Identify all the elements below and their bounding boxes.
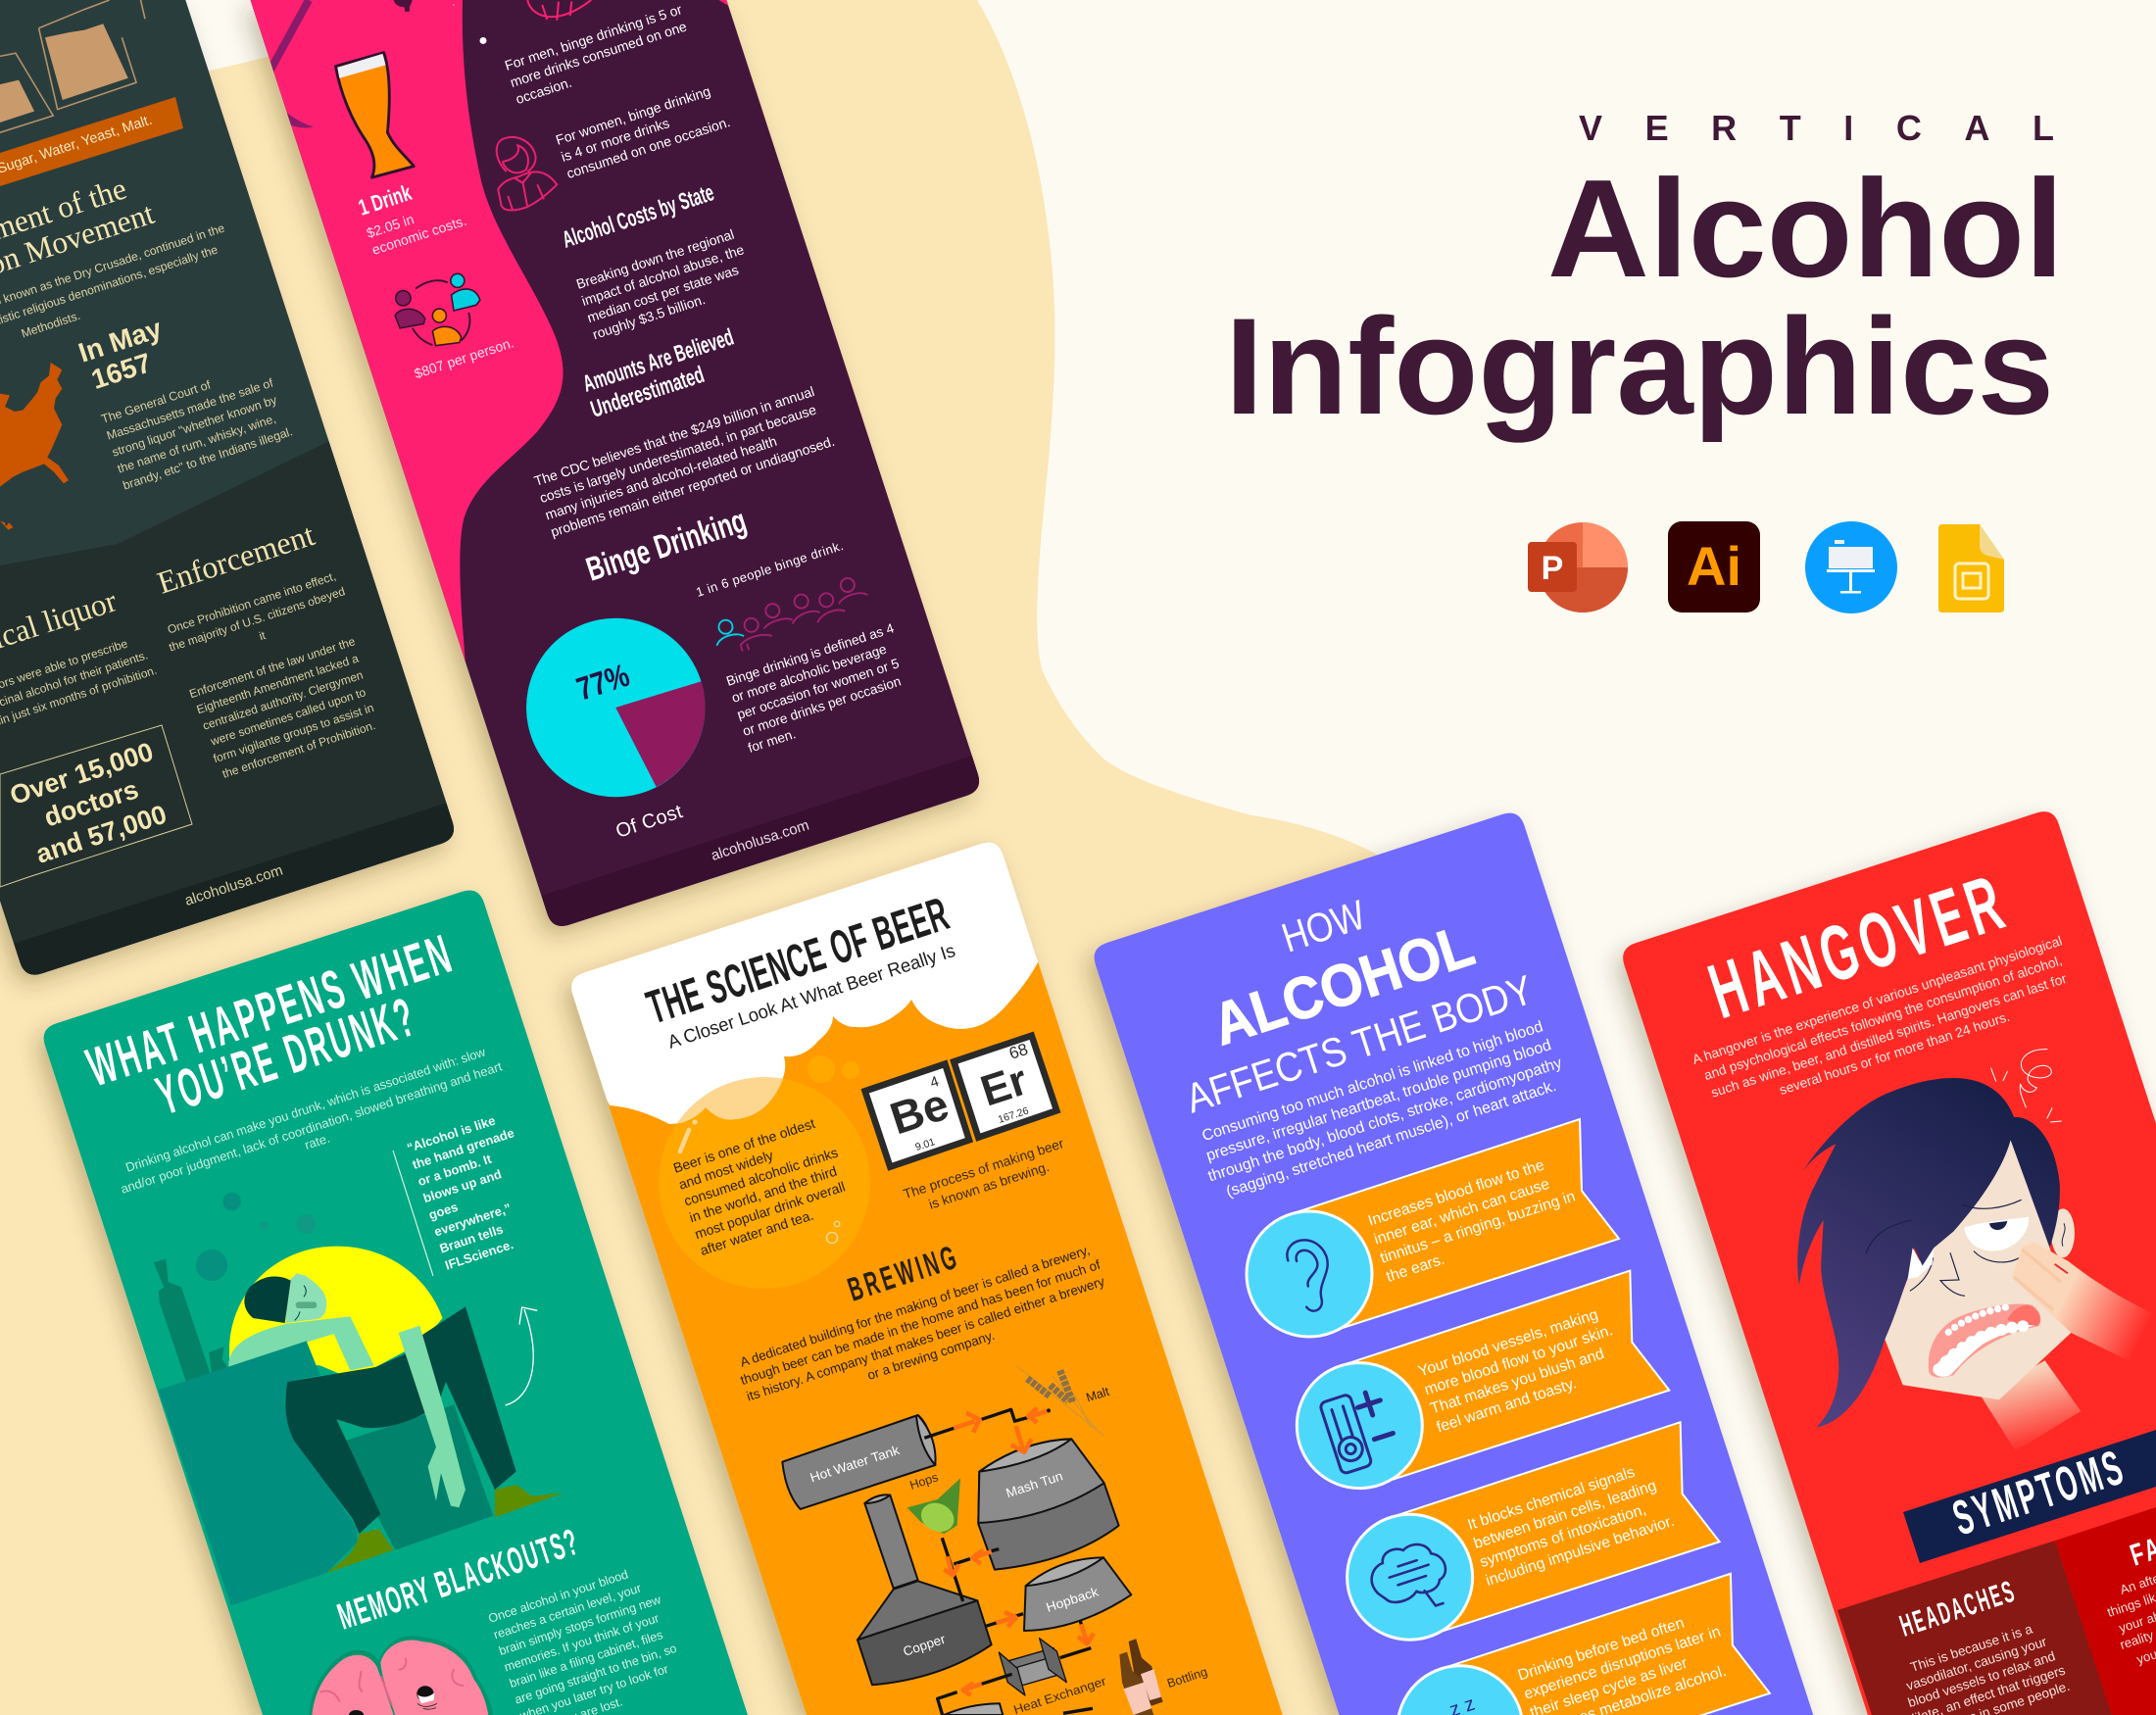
background bubbles bbox=[196, 1193, 316, 1281]
subheading: A Closer Look At What Beer Really Is bbox=[665, 941, 958, 1054]
text: process: The process of making beer bbox=[902, 1136, 1066, 1201]
callout: in may 1657: 1657 bbox=[87, 347, 155, 395]
lower dark section bbox=[0, 441, 454, 975]
text: intro: and/or poor judgment, lack of coordination, slowed breathing and heart bbox=[119, 1058, 504, 1197]
ear bbox=[2051, 1208, 2075, 1257]
heading: brewing: BREWING bbox=[844, 1238, 964, 1309]
hanging arm bbox=[399, 1326, 466, 1507]
ribbon 2: thermometer: That makes you blush and bbox=[1429, 1346, 1606, 1417]
hair bbox=[244, 1276, 291, 1323]
icon: powerpoint: P bbox=[1542, 550, 1563, 587]
text: intro: Drinking alcohol can make you drunk, which is associated with: slow bbox=[123, 1044, 488, 1175]
white dots bbox=[480, 37, 487, 44]
malt stalks bbox=[1016, 1365, 1104, 1436]
text: enforcement of the law: the enforcement of Prohibition. bbox=[220, 718, 377, 781]
lower teeth bbox=[1938, 1326, 2034, 1369]
illustration: beer tanks bbox=[0, 0, 145, 132]
text: brewing body: its history. A company that makes beer is called either a brewery bbox=[745, 1274, 1106, 1404]
diagram: brewing process: Hot Water Tank bbox=[808, 1443, 902, 1486]
text: process: is known as brewing. bbox=[927, 1159, 1051, 1212]
text: intro: and psychological effects following the consumption of alcohol, bbox=[1702, 953, 2064, 1083]
heading: binge drinking: Binge Drinking bbox=[582, 502, 751, 589]
back and arm bbox=[228, 1316, 374, 1370]
icon: ear bbox=[1283, 1234, 1342, 1314]
right block bbox=[346, 1404, 493, 1550]
traced top fragments bbox=[269, 0, 591, 211]
periodic tiles: be er: 68 bbox=[1006, 1040, 1030, 1063]
trousers bbox=[285, 1306, 516, 1534]
tank: hot water bbox=[782, 1415, 936, 1509]
bubble highlights bbox=[680, 1130, 840, 1243]
icon: three people bbox=[395, 273, 480, 346]
title block bbox=[1225, 108, 2064, 443]
upper teeth bbox=[1948, 1307, 2006, 1332]
foam overlap tint bbox=[659, 1077, 870, 1289]
text: cdc: costs is largely underestimated, in part because bbox=[538, 402, 818, 506]
text: beer oldest: consumed alcoholic drinks bbox=[682, 1145, 840, 1209]
icon: row of people bbox=[717, 578, 867, 652]
heat exchanger bbox=[999, 1639, 1066, 1695]
label: bottling: Bottling bbox=[1165, 1665, 1209, 1690]
text: dry crusade: Methodists. bbox=[20, 309, 82, 340]
text: memory blackouts body: Once alcohol in your blood bbox=[487, 1567, 630, 1626]
label: malt: Malt bbox=[1085, 1385, 1111, 1405]
text: men binge: For men, binge drinking is 5 or bbox=[503, 1, 684, 74]
ribbon 2: thermometer: more blood flow to your skin. bbox=[1422, 1322, 1615, 1398]
text: brewing body: though beer can be made in the home and has been for much of bbox=[739, 1257, 1102, 1388]
text: regional impact: Breaking down the regional bbox=[574, 226, 736, 292]
symptom panel: headaches bbox=[1838, 1541, 2112, 1715]
text: once prohibition: Once Prohibition came into effect, bbox=[166, 569, 337, 637]
heading: how alcohol affects the body: ALCOHOL bbox=[1204, 912, 1482, 1057]
text: 1 in 6: 1 in 6 people binge drink. bbox=[694, 538, 845, 600]
icon: woman outline bbox=[497, 137, 557, 211]
neck bbox=[1982, 1360, 2081, 1451]
decorative magenta strokes bbox=[269, 0, 309, 74]
heading: enforcement: Enforcement bbox=[153, 516, 318, 601]
symptom panel: fatigue: reality bbox=[2118, 1628, 2156, 1652]
heading: amounts underestimated bbox=[580, 324, 737, 423]
symptom panel: headaches: vasodilator, causing your bbox=[1904, 1634, 2049, 1693]
text: general court: Massachusetts made the sale of bbox=[105, 375, 275, 443]
chart: pie of cost bbox=[526, 618, 706, 797]
vessel: hopback bbox=[1024, 1557, 1131, 1631]
icon: illustrator bbox=[1668, 521, 1760, 612]
ribbon 3: brain bbox=[1348, 1422, 1720, 1640]
ribbon 3: brain: between brain cells, leading bbox=[1472, 1478, 1658, 1552]
ribbon 1: ear: tinnitus – a ringing, buzzing in bbox=[1378, 1188, 1578, 1267]
callout: in may 1657: In May bbox=[74, 313, 166, 368]
big beer bubble bbox=[659, 1077, 870, 1289]
periodic tiles: be er: 167.26 bbox=[997, 1104, 1030, 1126]
ribbon 2: thermometer: feel warm and toasty. bbox=[1435, 1375, 1579, 1436]
text: binge definition: for men. bbox=[746, 726, 798, 756]
text: economic costs: economic costs. bbox=[370, 213, 468, 258]
text: beer oldest: Beer is one of the oldest bbox=[671, 1115, 817, 1176]
text: general court: brandy, etc" to the Indians illegal. bbox=[122, 424, 294, 493]
panel: green what happens card bbox=[44, 891, 748, 1715]
ribbon 1: ear: the ears. bbox=[1385, 1251, 1446, 1286]
ribbon 3: brain: symptoms of intoxication, bbox=[1478, 1501, 1648, 1571]
pink organic panel bbox=[237, 0, 564, 688]
label: hops: Hops bbox=[908, 1470, 940, 1493]
eye bbox=[1964, 1217, 2029, 1251]
stat box: 15,000 doctors: and 57,000 bbox=[32, 800, 171, 869]
ribbon 4: sleep: Drinking before bed often bbox=[1516, 1615, 1687, 1685]
ear crease bbox=[2062, 1223, 2065, 1247]
heading: amounts underestimated: Underestimated bbox=[588, 362, 708, 423]
illustration: drunk person bbox=[154, 1193, 564, 1605]
text: intro: A hangover is the experience of various unpleasant physiological bbox=[1690, 933, 2064, 1067]
quote rule bbox=[393, 1151, 433, 1276]
text: brewing body: or a brewing company. bbox=[865, 1328, 997, 1383]
ribbon 1: ear: inner ear, which can cause bbox=[1372, 1176, 1552, 1249]
text: general court: the name of rum, whisky, wine, bbox=[116, 412, 277, 476]
heading: how alcohol affects the body bbox=[1180, 891, 1539, 1122]
text: enforcement of the law: form vigilante groups to assist in bbox=[212, 701, 375, 765]
periodic tiles: be er: 4 bbox=[928, 1073, 941, 1092]
heading: what happens when you're drunk: WHAT HAPPENS WHEN bbox=[79, 922, 461, 1098]
mouth bbox=[1929, 1304, 2040, 1377]
periodic tiles: be er: Be bbox=[884, 1078, 955, 1145]
text: intro: through the body, blood clots, stroke, cardiomyopathy bbox=[1206, 1054, 1564, 1185]
text: brewing body: A dedicated building for the making of beer is called a brewery, bbox=[738, 1243, 1092, 1370]
quote: “Alcohol is like bbox=[405, 1113, 497, 1155]
heading: what happens when you're drunk bbox=[79, 922, 461, 1126]
text: memory blackouts body: reaches a certain level, your bbox=[492, 1581, 643, 1642]
face lines bbox=[1866, 1200, 2023, 1296]
hair bbox=[1797, 1078, 2060, 1428]
periodic tiles: be er: 9.01 bbox=[914, 1136, 937, 1153]
quote: everywhere,” bbox=[432, 1200, 513, 1239]
panel: plum cost card bbox=[237, 0, 983, 930]
text: enforcement of the law: Eighteenth Amendment lacked a bbox=[195, 651, 361, 716]
banner: symptoms bbox=[1903, 1430, 2156, 1563]
text: enforcement of the law: centralized authority. Clergymen bbox=[201, 668, 365, 733]
ribbon 1: ear bbox=[1247, 1119, 1619, 1337]
heading: amounts underestimated: Amounts Are Believed bbox=[580, 324, 737, 398]
label: 77%: 77% bbox=[572, 657, 634, 708]
icon: brain bbox=[1364, 1536, 1456, 1622]
text: memory blackouts body: memories. If you think of your bbox=[503, 1611, 661, 1674]
text: women binge: For women, binge drinking bbox=[554, 83, 712, 148]
face bbox=[1885, 1137, 2071, 1399]
text: per person: $807 per person. bbox=[413, 334, 515, 381]
ribbon 4: sleep: experience disruptions later in bbox=[1522, 1624, 1723, 1703]
symptom panel: fatigue bbox=[2055, 1506, 2156, 1715]
periodic tiles: be er: Er bbox=[975, 1056, 1033, 1116]
stat box: 15,000 doctors: doctors bbox=[40, 774, 142, 832]
curved arrow bbox=[506, 1307, 537, 1405]
text: beer oldest: most popular drink overall bbox=[693, 1178, 847, 1242]
icon: thermometer bbox=[1319, 1385, 1400, 1474]
quote: IFLScience. bbox=[443, 1237, 515, 1273]
diagram: brewing process bbox=[782, 1365, 1209, 1715]
symptom panel: headaches: This is because it is a bbox=[1908, 1621, 2034, 1675]
icon: powerpoint bbox=[1528, 522, 1628, 612]
quote: goes bbox=[427, 1200, 460, 1222]
text: general court: The General Court of bbox=[100, 377, 213, 426]
icon: illustrator: Ai bbox=[1687, 535, 1741, 597]
shoes bbox=[326, 1485, 564, 1573]
ribbon 2: thermometer: Your blood vessels, making bbox=[1416, 1306, 1600, 1380]
vessel: copper bbox=[858, 1494, 992, 1685]
software icons row bbox=[1528, 521, 2004, 613]
text: enforcement of the law: were sometimes called upon to bbox=[208, 685, 368, 749]
text: economic costs: $2.05 in bbox=[365, 211, 416, 241]
quote: or a bomb. It bbox=[416, 1152, 494, 1189]
footer band bbox=[541, 756, 983, 930]
icon: top fragment bbox=[394, 0, 413, 12]
text: intro: several hours or for more than 24 hours. bbox=[1778, 1009, 2012, 1098]
diagram: brewing process: Copper bbox=[902, 1632, 948, 1659]
quote: Braun tells bbox=[438, 1222, 505, 1256]
diagram: brewing process: Hopback bbox=[1045, 1584, 1101, 1615]
text: cdc: many injuries and alcohol-related health bbox=[543, 433, 779, 522]
ribbon 3: brain: It blocks chemical signals bbox=[1466, 1464, 1637, 1534]
quote: the hand grenade bbox=[411, 1125, 516, 1172]
text: cdc: problems remain either reported or undiagnosed. bbox=[549, 433, 836, 540]
panel: dark prohibition card bbox=[0, 0, 457, 994]
footer url: alcoholusa.com bbox=[709, 817, 811, 864]
diagram: brewing process: Mash Tun bbox=[1004, 1468, 1064, 1500]
text: intro: pressure, irregular heartbeat, trouble pumping blood bbox=[1204, 1037, 1553, 1164]
text: men binge: occasion. bbox=[514, 74, 573, 107]
footer url: alcoholusa.com bbox=[182, 862, 285, 909]
panel: purple body card bbox=[1095, 813, 1813, 1715]
icon: google slides bbox=[1938, 524, 2004, 612]
text: binge definition: or more drinks per occasion bbox=[741, 673, 903, 739]
stat box: 15,000 doctors bbox=[0, 725, 192, 887]
hops bbox=[907, 1478, 960, 1537]
periodic tiles: be er bbox=[865, 1036, 1056, 1167]
bottom vessel bbox=[944, 1703, 1003, 1715]
small bubbles bbox=[808, 1055, 859, 1083]
text: intro: (sagging, stretched heart muscle), or heart attack. bbox=[1224, 1078, 1558, 1200]
text: women binge: consumed on one occasion. bbox=[564, 114, 732, 181]
face details bbox=[295, 1286, 306, 1320]
heading: science of beer: THE SCIENCE OF BEER bbox=[641, 888, 956, 1034]
head bbox=[286, 1273, 326, 1323]
heading: memory blackouts: MEMORY BLACKOUTS? bbox=[333, 1522, 584, 1639]
text: once prohibition: it bbox=[258, 628, 268, 643]
text: men binge: more drinks consumed on one bbox=[509, 18, 689, 90]
text: intro: such as wine, beer, and distilled spirits. Hangovers can last for bbox=[1709, 971, 2069, 1101]
heading: how alcohol affects the body: AFFECTS THE BODY bbox=[1180, 966, 1539, 1122]
vessel: mash tun bbox=[978, 1439, 1119, 1570]
text: general court: strong liquor "whether known by bbox=[111, 393, 279, 460]
stat box: 15,000 doctors: Over 15,000 bbox=[6, 737, 157, 810]
ribbon 4: sleep bbox=[1397, 1574, 1770, 1715]
heading: how alcohol affects the body: HOW bbox=[1276, 891, 1371, 961]
text: once prohibition: the majority of U.S. citizens obeyed bbox=[168, 584, 347, 655]
illustration: brain bbox=[309, 1636, 493, 1715]
text: intro: Consuming too much alcohol is linked to high blood bbox=[1200, 1018, 1545, 1145]
illustration: hungover face bbox=[1797, 1050, 2156, 1451]
ribbon 2: thermometer bbox=[1297, 1271, 1669, 1489]
text: memory blackouts body: brain like a filing cabinet, files bbox=[508, 1628, 664, 1690]
yellow sun bbox=[229, 1247, 443, 1375]
icon: beer glass bbox=[335, 53, 414, 177]
text: women binge: is 4 or more drinks bbox=[560, 115, 671, 165]
quote: blows up and bbox=[421, 1166, 504, 1205]
icon: group fragment bbox=[527, 0, 591, 21]
symptom panel: headaches: HEADACHES bbox=[1895, 1574, 2020, 1643]
footer band bbox=[14, 803, 458, 979]
text: regional impact: impact of alcohol abuse, the bbox=[580, 241, 746, 309]
symptom panel: headaches: blood vessels to relax and bbox=[1906, 1648, 2057, 1710]
text: memory blackouts body: brain simply stops forming new bbox=[497, 1592, 663, 1658]
white foam header bbox=[529, 784, 1078, 1124]
text: binge definition: Binge drinking is defined as 4 bbox=[724, 620, 896, 689]
panel: beer science card bbox=[529, 784, 1283, 1715]
overline: vertical: VERTICAL bbox=[1579, 108, 2054, 148]
flow arrows bbox=[944, 1408, 1094, 1695]
white tuft bbox=[1908, 1248, 1934, 1279]
decorative tan blob bbox=[0, 0, 1725, 1715]
text: memory blackouts body: are going straight to the bin, so bbox=[513, 1642, 678, 1707]
text: cdc: The CDC believes that the $249 billion in annual bbox=[532, 383, 816, 489]
left table bbox=[159, 1341, 358, 1605]
ribbon 1: ear: Increases blood flow to the bbox=[1366, 1156, 1546, 1230]
bottles bbox=[154, 1258, 227, 1382]
title: infographics: Infographics bbox=[1225, 289, 2054, 443]
label: of cost: Of Cost bbox=[613, 801, 686, 843]
text: beer oldest: and most widely bbox=[676, 1147, 775, 1193]
label: 1 drink: 1 Drink bbox=[356, 179, 415, 220]
text: beer oldest: in the world, and the third bbox=[687, 1163, 839, 1225]
illustration: us map bbox=[0, 363, 69, 530]
text: regional impact: roughly $3.5 billion. bbox=[591, 291, 707, 342]
text: binge definition: or more alcoholic beverage bbox=[730, 642, 888, 706]
icon: keynote bbox=[1805, 521, 1897, 613]
panel: red hangover card bbox=[1623, 811, 2156, 1715]
pink corner bbox=[719, 0, 729, 6]
heading: alcohol costs by state: Alcohol Costs by State bbox=[560, 179, 717, 254]
text: intro: rate. bbox=[303, 1131, 331, 1152]
text: binge definition: per occasion for women or 5 bbox=[735, 656, 902, 722]
text: regional impact: median cost per state was bbox=[585, 262, 741, 325]
text: beer oldest: after water and tea. bbox=[698, 1207, 815, 1258]
ribbon 3: brain: including impulsive behavior. bbox=[1484, 1513, 1677, 1590]
hand and arm bbox=[2012, 1242, 2156, 1375]
heading: what happens when you're drunk: YOU’RE DRUNK? bbox=[149, 985, 423, 1126]
text: enforcement of the law: Enforcement of the law under the bbox=[188, 634, 357, 701]
bottles bbox=[1119, 1639, 1163, 1715]
pipes bbox=[924, 1409, 1093, 1715]
dizzy doodle bbox=[1991, 1050, 2061, 1122]
title: alcohol: Alcohol bbox=[1547, 151, 2064, 307]
